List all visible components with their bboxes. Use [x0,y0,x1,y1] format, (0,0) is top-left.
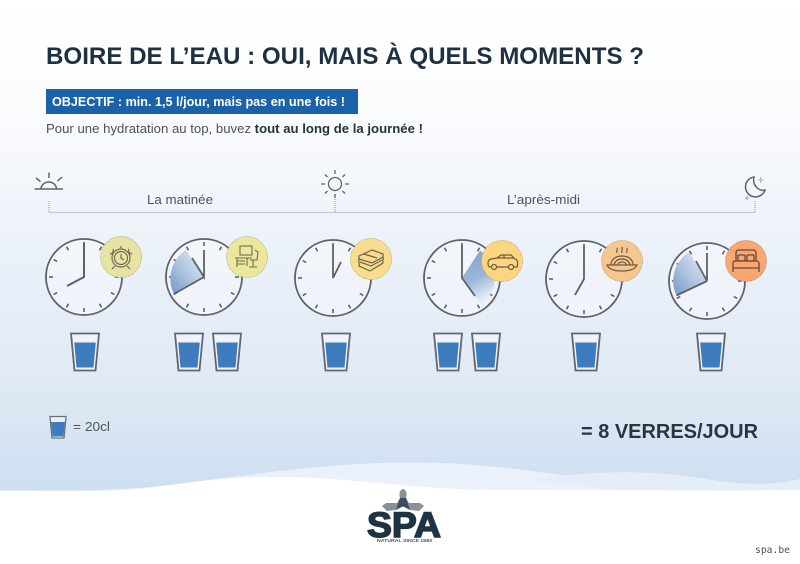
mascot [382,489,424,511]
clock 6 [669,243,745,319]
total: = 8 VERRES/JOUR [581,421,759,443]
objective banner: OBJECTIF : min. 1,5 l/jour, mais pas en une fois ! [52,95,345,109]
glass 4 [322,334,350,370]
intro text: Pour une hydratation au top, buvez tout au long de la journée ! [46,122,423,136]
badge: pasta [602,240,642,282]
glass 5 [434,334,462,370]
clock 1 [46,239,122,315]
clock 2 [166,239,242,315]
objective banner [46,89,358,114]
label: l'après-midi: L’après-midi [507,193,580,207]
glass 2 [175,334,203,370]
icon: sun [321,170,349,198]
legend: 20cl: = 20cl [73,420,110,434]
icon: moon [745,177,765,200]
logo: SPA: NATURAL SINCE 1583 [377,538,433,543]
logo: SPA [367,489,441,545]
badge: bed [726,240,766,282]
glasses row [71,334,725,370]
legend: 20cl [50,416,110,438]
icon: sunrise [34,172,63,189]
wedge [673,252,707,296]
clock 3 [295,240,371,316]
badge: car [482,240,522,282]
logo: SPA: SPA [367,506,441,545]
badge: sandwich [350,238,392,280]
wedge [170,250,204,294]
timeline [49,193,755,212]
glass 6 [472,334,500,370]
wave footer [0,462,800,564]
title: BOIRE DE L’EAU : OUI, MAIS À QUELS MOMENTS ? [46,42,644,70]
badge: alarm clock [100,236,142,278]
clock 5 [546,241,622,317]
badge: desk [226,236,268,278]
glass 3 [213,334,241,370]
glass 8 [697,334,725,370]
glass 1 [71,334,99,370]
clock 4 [424,240,500,316]
credit: spa.be [755,545,790,556]
glass 7 [572,334,600,370]
label: la matinée: La matinée [147,193,213,207]
wedge [462,250,495,304]
